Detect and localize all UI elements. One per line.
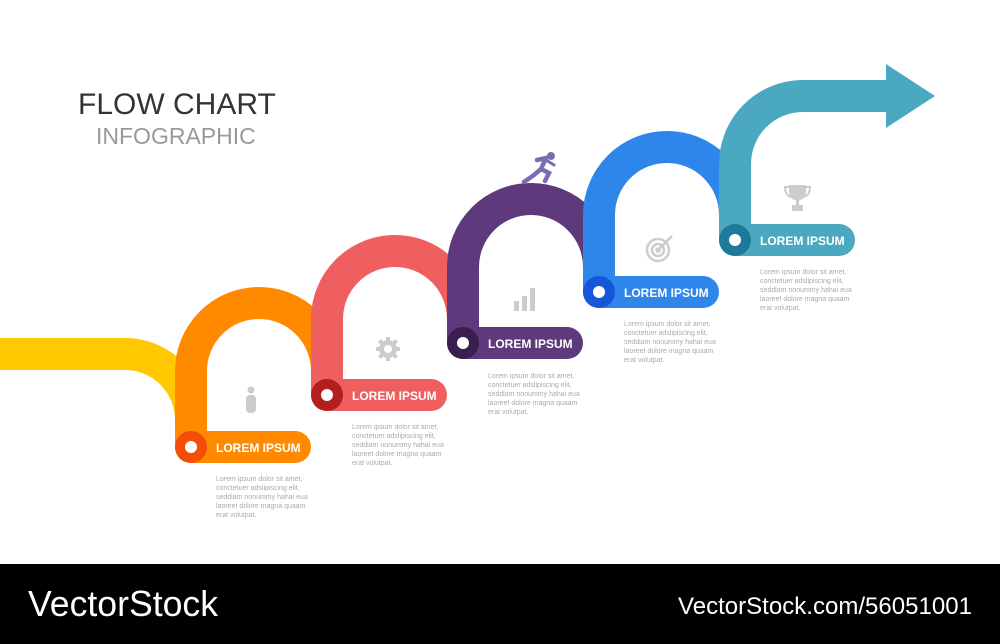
descriptions: erat volutpat. [352,460,393,467]
descriptions: conctetuer adslipiscing elit, [624,330,708,337]
descriptions: seddiam nonummy hahai eua [488,391,580,398]
descriptions: erat volutpat. [624,357,665,364]
descriptions: conctetuer adslipiscing elit, [488,382,572,389]
descriptions: Lorem ipsum dolor sit amet, [760,269,846,276]
icon: gear [376,337,400,361]
step 3 purple [447,199,599,359]
footer: VectorStock.com/56051001 [678,593,972,620]
path: yellow start [0,354,191,420]
step 5 teal with arrow: LOREM IPSUM [760,234,845,248]
icon: runner [524,152,555,182]
step 1 orange: LOREM IPSUM [216,441,301,455]
descriptions: seddiam nonummy hahai eua [760,287,852,294]
icon: trophy [785,185,810,211]
descriptions [216,269,852,519]
icon: bar chart [514,288,535,311]
descriptions: laoreet dolore magna quaam [352,451,442,458]
descriptions: laoreet dolore magna quaam [488,400,578,407]
descriptions: conctetuer adslipiscing elit, [216,485,300,492]
descriptions: Lorem ipsum dolor sit amet, [624,321,710,328]
step 4 blue [583,147,735,308]
descriptions: seddiam nonummy hahai eua [624,339,716,346]
descriptions: seddiam nonummy hahai eua [352,442,444,449]
descriptions: Lorem ipsum dolor sit amet, [216,476,302,483]
step 2 red [311,251,463,411]
step 5 teal with arrow [719,64,935,256]
descriptions: conctetuer adslipiscing elit, [352,433,436,440]
descriptions: conctetuer adslipiscing elit, [760,278,844,285]
title: FLOW CHART [78,88,276,121]
descriptions: seddiam nonummy hahai eua [216,494,308,501]
descriptions: laoreet dolore magna quaam [624,348,714,355]
descriptions: Lorem ipsum dolor sit amet, [488,373,574,380]
descriptions: erat volutpat. [760,305,801,312]
descriptions: erat volutpat. [488,409,529,416]
step 1 orange [175,303,327,463]
footer: VectorStock [28,583,219,624]
step 3 purple: LOREM IPSUM [488,337,573,351]
descriptions: erat volutpat. [216,512,257,519]
descriptions: Lorem ipsum dolor sit amet, [352,424,438,431]
step 2 red: LOREM IPSUM [352,389,437,403]
title [78,88,276,149]
footer [0,564,1000,644]
step 4 blue: LOREM IPSUM [624,286,709,300]
title: INFOGRAPHIC [96,123,256,149]
descriptions: laoreet dolore magna quaam [216,503,306,510]
descriptions: laoreet dolore magna quaam [760,296,850,303]
icon: person [246,386,256,413]
icon: target [647,236,672,261]
